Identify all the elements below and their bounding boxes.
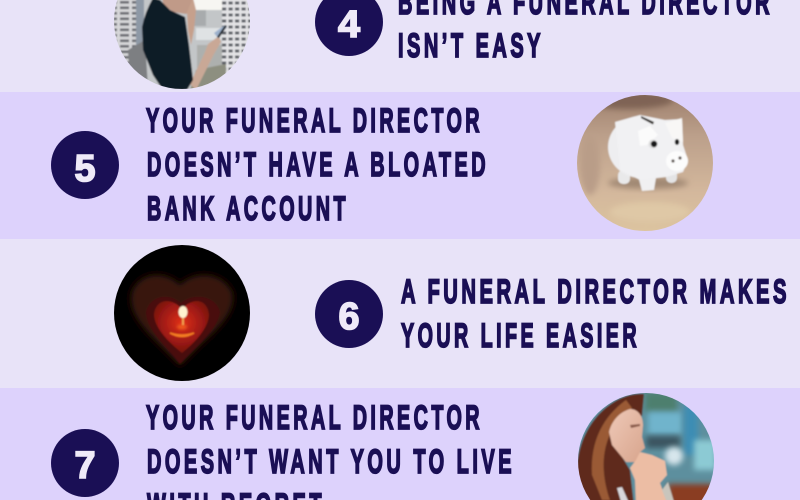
badge: number 7: [51, 429, 119, 497]
photo: woman praying with clasped hands: [575, 390, 720, 500]
panel: row 5 background: [0, 92, 800, 239]
badge: number 6: 6: [338, 296, 360, 338]
heading: your funeral director doesn't have a bloated bank account: BANK ACCOUNT: [147, 190, 349, 228]
photo: candle in heart-shaped hands: [114, 245, 250, 381]
panel: row 6 background: [0, 239, 800, 388]
heading: a funeral director makes your life easier: [401, 273, 790, 355]
heading: your funeral director doesn't want you to live with regret: [146, 399, 515, 500]
heading: being a funeral director isn't easy: ISN’T EASY: [398, 27, 544, 65]
badge: number 4: [315, 0, 383, 56]
heading: your funeral director doesn't have a bloated bank account: DOESN’T HAVE A BLOATED: [147, 146, 489, 184]
heading: your funeral director doesn't want you to live with regret: DOESN’T WANT YOU TO LIVE: [147, 443, 515, 481]
panel: row 4 background: [0, 0, 800, 92]
panel: row 7 background: [0, 388, 800, 500]
heading: your funeral director doesn't want you to live with regret: YOUR FUNERAL DIRECTOR: [146, 399, 483, 437]
badge: number 6: [315, 280, 383, 348]
photo: person with phone by city windows: [114, 0, 250, 89]
heading: being a funeral director isn't easy: [398, 0, 773, 65]
badge: number 4: 4: [338, 4, 360, 46]
heading: your funeral director doesn't have a bloated bank account: YOUR FUNERAL DIRECTOR: [146, 102, 483, 140]
badge: number 5: 5: [74, 148, 96, 190]
heading: your funeral director doesn't have a bloated bank account: [146, 102, 489, 228]
photo: white piggy bank on wood: [575, 91, 715, 233]
badge: number 7: 7: [74, 445, 96, 487]
badge: number 5: [51, 131, 119, 199]
